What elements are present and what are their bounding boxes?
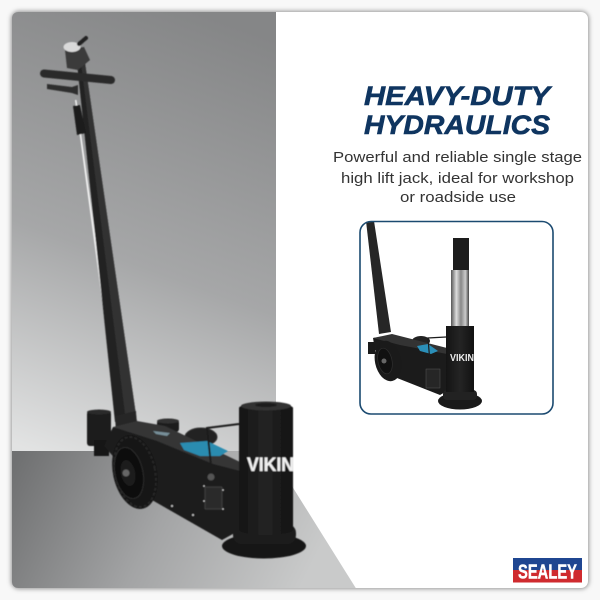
back wheel and rear post bbox=[157, 418, 217, 446]
inset lever bbox=[427, 336, 446, 354]
data plate bbox=[203, 485, 224, 510]
inset body top bbox=[373, 334, 447, 354]
handle head and dial bbox=[64, 38, 90, 70]
description text bbox=[333, 149, 582, 206]
inset wheel bbox=[374, 340, 398, 382]
rear weight cylinder bbox=[87, 410, 111, 456]
description text: or roadside use bbox=[400, 189, 516, 206]
release lever bbox=[47, 84, 78, 95]
latch box bbox=[73, 105, 86, 135]
inset panel: raised jack bbox=[360, 221, 553, 414]
base plate bbox=[222, 534, 306, 558]
main cylinder bbox=[239, 402, 293, 535]
description text: Powerful and reliable single stage bbox=[333, 149, 582, 166]
inset body bbox=[373, 335, 447, 395]
front wheel bbox=[106, 431, 164, 513]
inset cylinder bbox=[446, 326, 474, 392]
handle T-bar grip bbox=[44, 74, 111, 80]
SEALEY logo bbox=[513, 558, 582, 584]
inset base bbox=[438, 396, 482, 410]
inset VIKING logo: VIKIN bbox=[450, 353, 474, 364]
inset back wheel bbox=[412, 336, 430, 344]
inset chrome ram bbox=[451, 270, 469, 327]
inset wheel hub bbox=[382, 358, 386, 364]
pole socket bbox=[115, 411, 137, 432]
photo backdrop: wall and floor bbox=[12, 12, 357, 590]
inset jack photo bbox=[366, 221, 482, 410]
main product photo: hydraulic jack bbox=[44, 38, 306, 558]
inset border bbox=[360, 222, 553, 414]
inset ram top block bbox=[453, 238, 469, 271]
inset data plate bbox=[426, 369, 440, 388]
inset collar bbox=[443, 390, 477, 400]
lever knob bbox=[208, 474, 214, 480]
inset rear weight bbox=[368, 342, 375, 354]
heading: HEAVY-DUTY bbox=[364, 81, 553, 111]
heading: HYDRAULICS bbox=[364, 110, 550, 140]
cylinder VIKING logo: VIKIN bbox=[247, 455, 294, 476]
jack handle pole bbox=[75, 63, 137, 422]
jack body bbox=[104, 421, 240, 540]
description text: high lift jack, ideal for workshop bbox=[341, 170, 574, 187]
heading bbox=[364, 81, 553, 140]
inset blue label bbox=[417, 344, 438, 354]
blue label bbox=[180, 441, 228, 456]
SEALEY logo: SEALEY bbox=[518, 562, 577, 584]
collar bbox=[233, 524, 296, 544]
bent pump lever bbox=[207, 424, 239, 474]
inset handle bbox=[366, 221, 391, 334]
inset wheel rim bbox=[378, 348, 392, 374]
